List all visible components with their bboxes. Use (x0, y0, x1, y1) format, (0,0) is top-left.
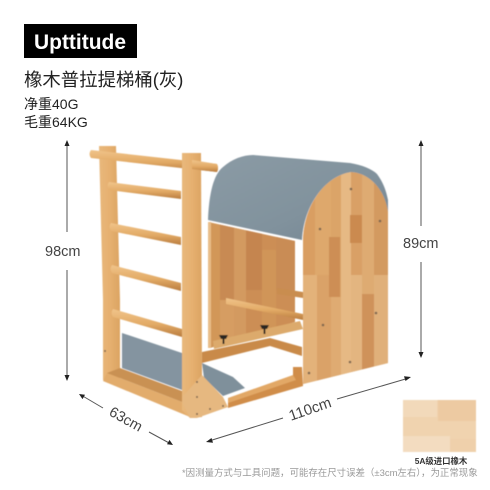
dimension: height 98cm: 98cm (45, 244, 80, 260)
dimension: height 89cm (403, 140, 438, 358)
screws (104, 188, 381, 415)
title: 橡木普拉提梯桶(灰) (24, 69, 183, 90)
barrel handle bars (213, 288, 303, 349)
ladder barrel product (90, 146, 388, 418)
dimension: depth 63cm (79, 394, 173, 445)
base frame bars (202, 338, 303, 408)
dimension: width 110cm: 110cm (287, 394, 334, 425)
weight specs: 毛重64KG (24, 114, 88, 130)
swatch caption: 5A级进口橡木 (415, 456, 468, 466)
weight specs (24, 96, 88, 130)
footnote: *因测量方式与工具问题，可能存在尺寸误差（±3cm左右），为正常现象 (182, 467, 478, 479)
base gusset (183, 375, 228, 418)
barrel wooden side arch (303, 165, 388, 390)
barrel back panel (208, 220, 295, 350)
ladder top rung end (192, 160, 218, 172)
ladder bottom beam (103, 373, 190, 417)
dimension: height 89cm: 89cm (403, 236, 438, 252)
knobs (219, 325, 269, 344)
logo: Upttitude: Upttitude (34, 30, 126, 54)
weight specs: 净重40G (24, 96, 78, 112)
dimension: width 110cm (206, 376, 411, 443)
dimension: height 98cm (45, 140, 80, 381)
ladder rungs (90, 150, 218, 337)
wood sample swatch (403, 400, 476, 452)
logo: Upttitude (24, 24, 137, 58)
ladder grey foot pad (122, 333, 245, 396)
barrel grey pad (208, 155, 388, 240)
dimension: depth 63cm: 63cm (106, 404, 145, 435)
ladder right rail (182, 153, 202, 418)
ladder left rail (99, 146, 120, 380)
